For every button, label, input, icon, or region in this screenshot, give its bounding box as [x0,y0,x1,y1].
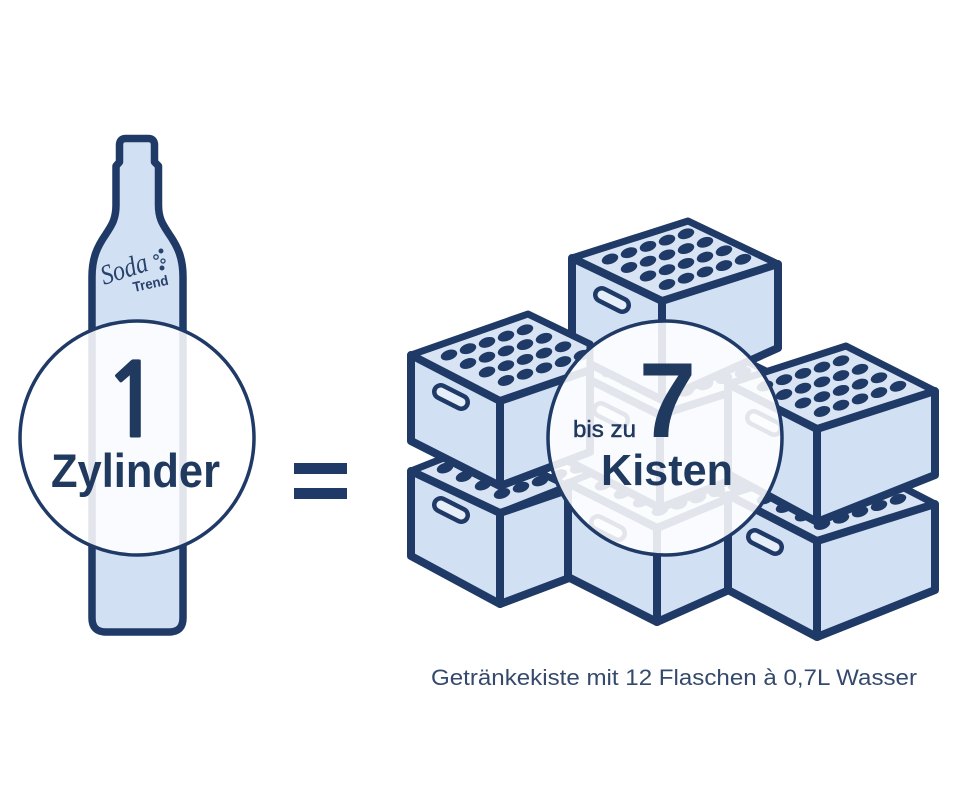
lid [572,221,778,301]
handle [592,401,630,429]
callout circle: bis zu 7 Kisten [548,321,782,555]
handle [746,528,784,556]
left face [411,471,500,604]
lid [570,332,778,415]
right face [500,370,590,486]
right face [660,377,778,508]
caption: Getränkekiste mit 12 Flaschen à 0,7L Wasser [431,665,917,690]
logo word: Soda: Soda [97,247,152,292]
right face [662,264,778,400]
left face [572,258,662,400]
lid [728,458,935,541]
left face [728,495,817,637]
right face [657,498,729,622]
lid [568,453,729,528]
logo word: Trend: Trend [131,272,170,295]
right face [500,473,617,604]
label Zylinder: Zylinder [51,444,220,497]
lid [728,346,935,429]
label Kisten: Kisten [601,446,733,495]
logo bubbles [154,249,165,270]
crate: middle centre [570,332,778,508]
circle lens [548,321,782,555]
logo: SodaTrend [97,247,170,295]
number 1: 1 [102,351,164,453]
handle [432,383,470,411]
handle [745,409,783,437]
crate: lower left [411,435,617,604]
equals sign [294,463,347,499]
circle lens [20,321,254,555]
left face [568,483,657,622]
lid [411,444,568,513]
bottle outline [92,138,183,632]
left face [411,355,500,486]
number 7: 7 [639,340,696,460]
crate: top centre [572,221,778,400]
lid [411,314,590,401]
label bis zu: bis zu [573,416,636,442]
handle [593,286,631,314]
right face [817,504,935,637]
left face [728,384,817,522]
crate: bottom centre [568,452,746,622]
crate: upper left [411,314,592,486]
crate: lower right [728,458,935,637]
crate: upper right [728,346,935,522]
right face [817,391,935,522]
handle [432,496,470,524]
callout circle: 1 Zylinder [20,321,254,555]
bottle [92,138,183,632]
left face [570,370,660,508]
handle [589,514,627,542]
